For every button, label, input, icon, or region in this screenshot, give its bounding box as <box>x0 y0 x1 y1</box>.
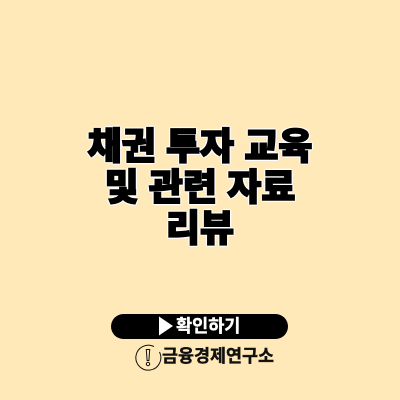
title line 1: 채권 투자 교육 <box>88 126 312 167</box>
title line 3: 리뷰 <box>166 208 234 249</box>
source name: 금융경제연구소 <box>162 346 274 366</box>
title line 2: 및 관련 자료 <box>105 167 295 208</box>
source attribution <box>135 344 274 371</box>
button label: 확인하기 <box>176 316 240 336</box>
button: confirm <box>111 314 288 339</box>
icon: exclamation circle <box>135 344 162 371</box>
title <box>86 126 314 249</box>
icon: play triangle <box>159 316 173 336</box>
